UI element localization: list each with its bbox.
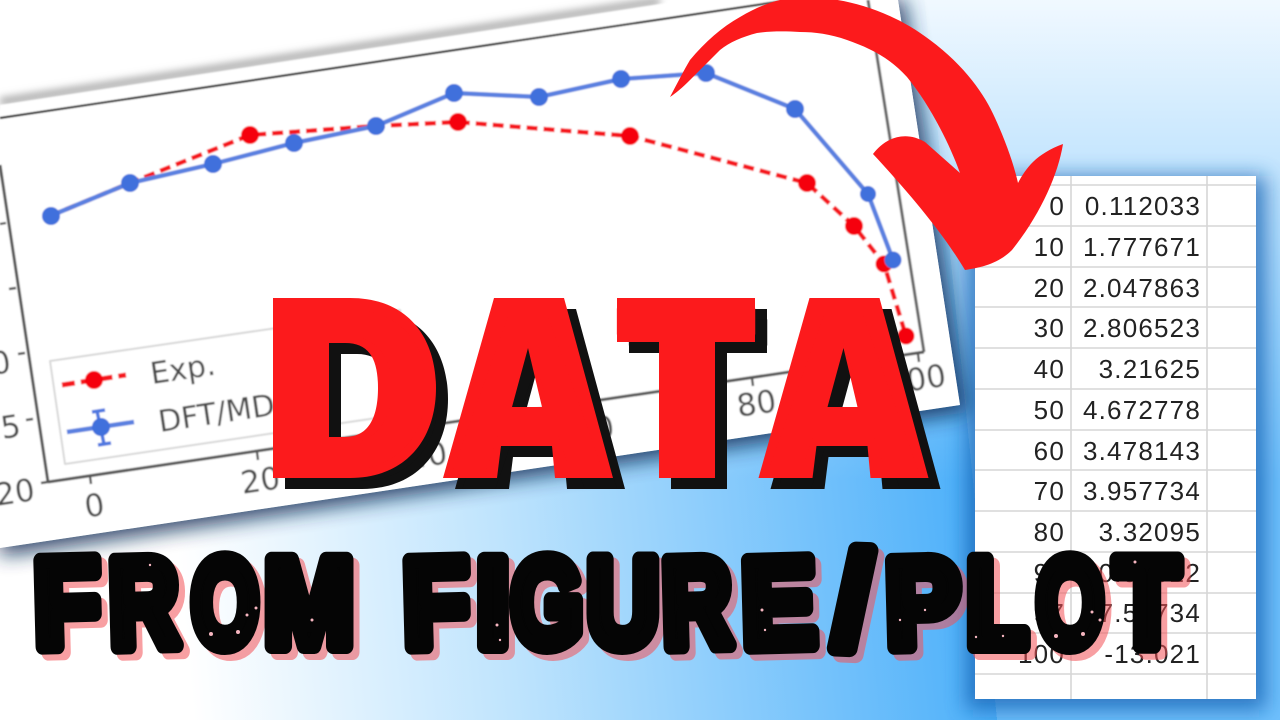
subtitle pink shadow: P	[890, 539, 968, 680]
subtitle pink shadow: I	[483, 539, 515, 679]
arrow: curved red arrow to table	[670, 0, 1063, 270]
subtitle pink shadow: E	[746, 539, 824, 680]
subtitle black letters: P	[884, 533, 962, 674]
second column values: 7.51734	[1099, 598, 1201, 628]
second column values: 0.112033	[1085, 191, 1201, 221]
first column values: 97	[1034, 598, 1065, 628]
second column values: 3.32095	[1099, 517, 1201, 547]
title shadow: A	[772, 276, 939, 539]
title letters: T	[614, 257, 758, 520]
subtitle pink shadow: O	[1042, 539, 1110, 679]
subtitle pink shadow: G	[517, 539, 589, 679]
subtitle pink shadow: R	[113, 538, 186, 680]
title letters	[266, 257, 928, 528]
subtitle black letters: O	[1036, 533, 1104, 673]
second column values: 3.478143	[1083, 436, 1201, 466]
x axis tick labels: 100	[885, 358, 948, 402]
subtitle black letters: L	[966, 533, 1028, 673]
subtitle black letters: R	[660, 532, 733, 674]
plot axes frame	[0, 0, 924, 484]
subtitle black letters: M	[264, 532, 354, 673]
title letters: A	[760, 265, 927, 528]
subtitle: FROM FIGURE/PLOT	[32, 526, 1185, 681]
title shadow: T	[626, 268, 770, 531]
first column values: 10	[1034, 232, 1065, 262]
second column values: 3.957734	[1083, 476, 1201, 506]
table drop shadow	[966, 176, 1266, 710]
subtitle black letters: F	[32, 532, 102, 674]
subtitle black letters: O	[191, 533, 259, 673]
subtitle black letters: T	[1115, 534, 1179, 673]
subtitle pink shadow: /	[839, 532, 879, 681]
first column values: 0	[1049, 191, 1065, 221]
x axis tick labels: 60	[572, 409, 617, 451]
panel: plot screenshot	[0, 0, 960, 548]
subtitle pink shadow: T	[1121, 540, 1185, 679]
subtitle pink shadow: F	[407, 538, 477, 680]
subtitle pink shadow: F	[38, 538, 108, 680]
title letters: D	[266, 257, 436, 520]
subtitle black letters: I	[477, 533, 509, 673]
subtitle black letters: F	[401, 532, 471, 674]
title shadow	[278, 268, 940, 539]
subtitle black letters: R	[107, 532, 180, 674]
x axis tick labels: 0	[82, 487, 107, 525]
subtitle black letters: U	[587, 533, 659, 673]
legend: DFT/MD	[156, 388, 277, 440]
legend: Exp.	[148, 348, 218, 392]
subtitle pink shadow: O	[197, 539, 265, 679]
first column values: 70	[1034, 476, 1065, 506]
red dashed experimental series	[50, 113, 914, 344]
x axis tick labels	[82, 358, 948, 525]
subtitle pink shadow: U	[593, 539, 665, 679]
subtitle pink shadow: L	[972, 539, 1034, 679]
subtitle black letters: E	[740, 533, 818, 674]
second column values: 3.21625	[1099, 354, 1201, 384]
subtitle pink shadow	[38, 532, 1185, 681]
second column values: 4.672778	[1083, 395, 1201, 425]
x axis tick labels: 20	[238, 460, 283, 502]
first column values: 90	[1034, 558, 1065, 588]
subtitle black letters: /	[833, 526, 873, 675]
subtitle black letters	[32, 526, 1179, 675]
x axis tick labels: 40	[405, 435, 450, 477]
title: DATA	[266, 257, 940, 539]
plot sheet drop shadow	[0, 0, 968, 556]
first column values: 40	[1034, 354, 1065, 384]
first column values: 60	[1034, 436, 1065, 466]
subtitle pink shadow: M	[270, 538, 360, 679]
second column values	[1083, 191, 1201, 669]
x axis tick labels: 80	[734, 383, 779, 425]
second column values: -13.021	[1104, 639, 1201, 669]
title shadow: A	[457, 276, 623, 539]
spreadsheet grid	[975, 176, 1256, 699]
first column values: 30	[1034, 313, 1065, 343]
second column values: 1.777671	[1083, 232, 1201, 262]
legend	[50, 310, 417, 464]
first column values: 80	[1034, 517, 1065, 547]
title shadow: D	[278, 268, 448, 531]
y axis tick labels	[0, 350, 34, 506]
blue DFT/MD series	[42, 64, 902, 268]
panel: spreadsheet	[975, 176, 1256, 699]
first column values	[1018, 191, 1065, 669]
title letters: A	[445, 265, 611, 528]
first column values: 50	[1034, 395, 1065, 425]
subtitle pink shadow: R	[666, 538, 739, 680]
first column values: 20	[1034, 273, 1065, 303]
subtitle distressed specks	[149, 560, 1137, 641]
second column values: 0.93022	[1099, 558, 1201, 588]
first column values: 100	[1018, 639, 1065, 669]
second column values: 2.806523	[1083, 313, 1201, 343]
sheet fold shadow	[0, 1, 660, 102]
second column values: 2.047863	[1083, 273, 1201, 303]
subtitle black letters: G	[511, 533, 583, 673]
